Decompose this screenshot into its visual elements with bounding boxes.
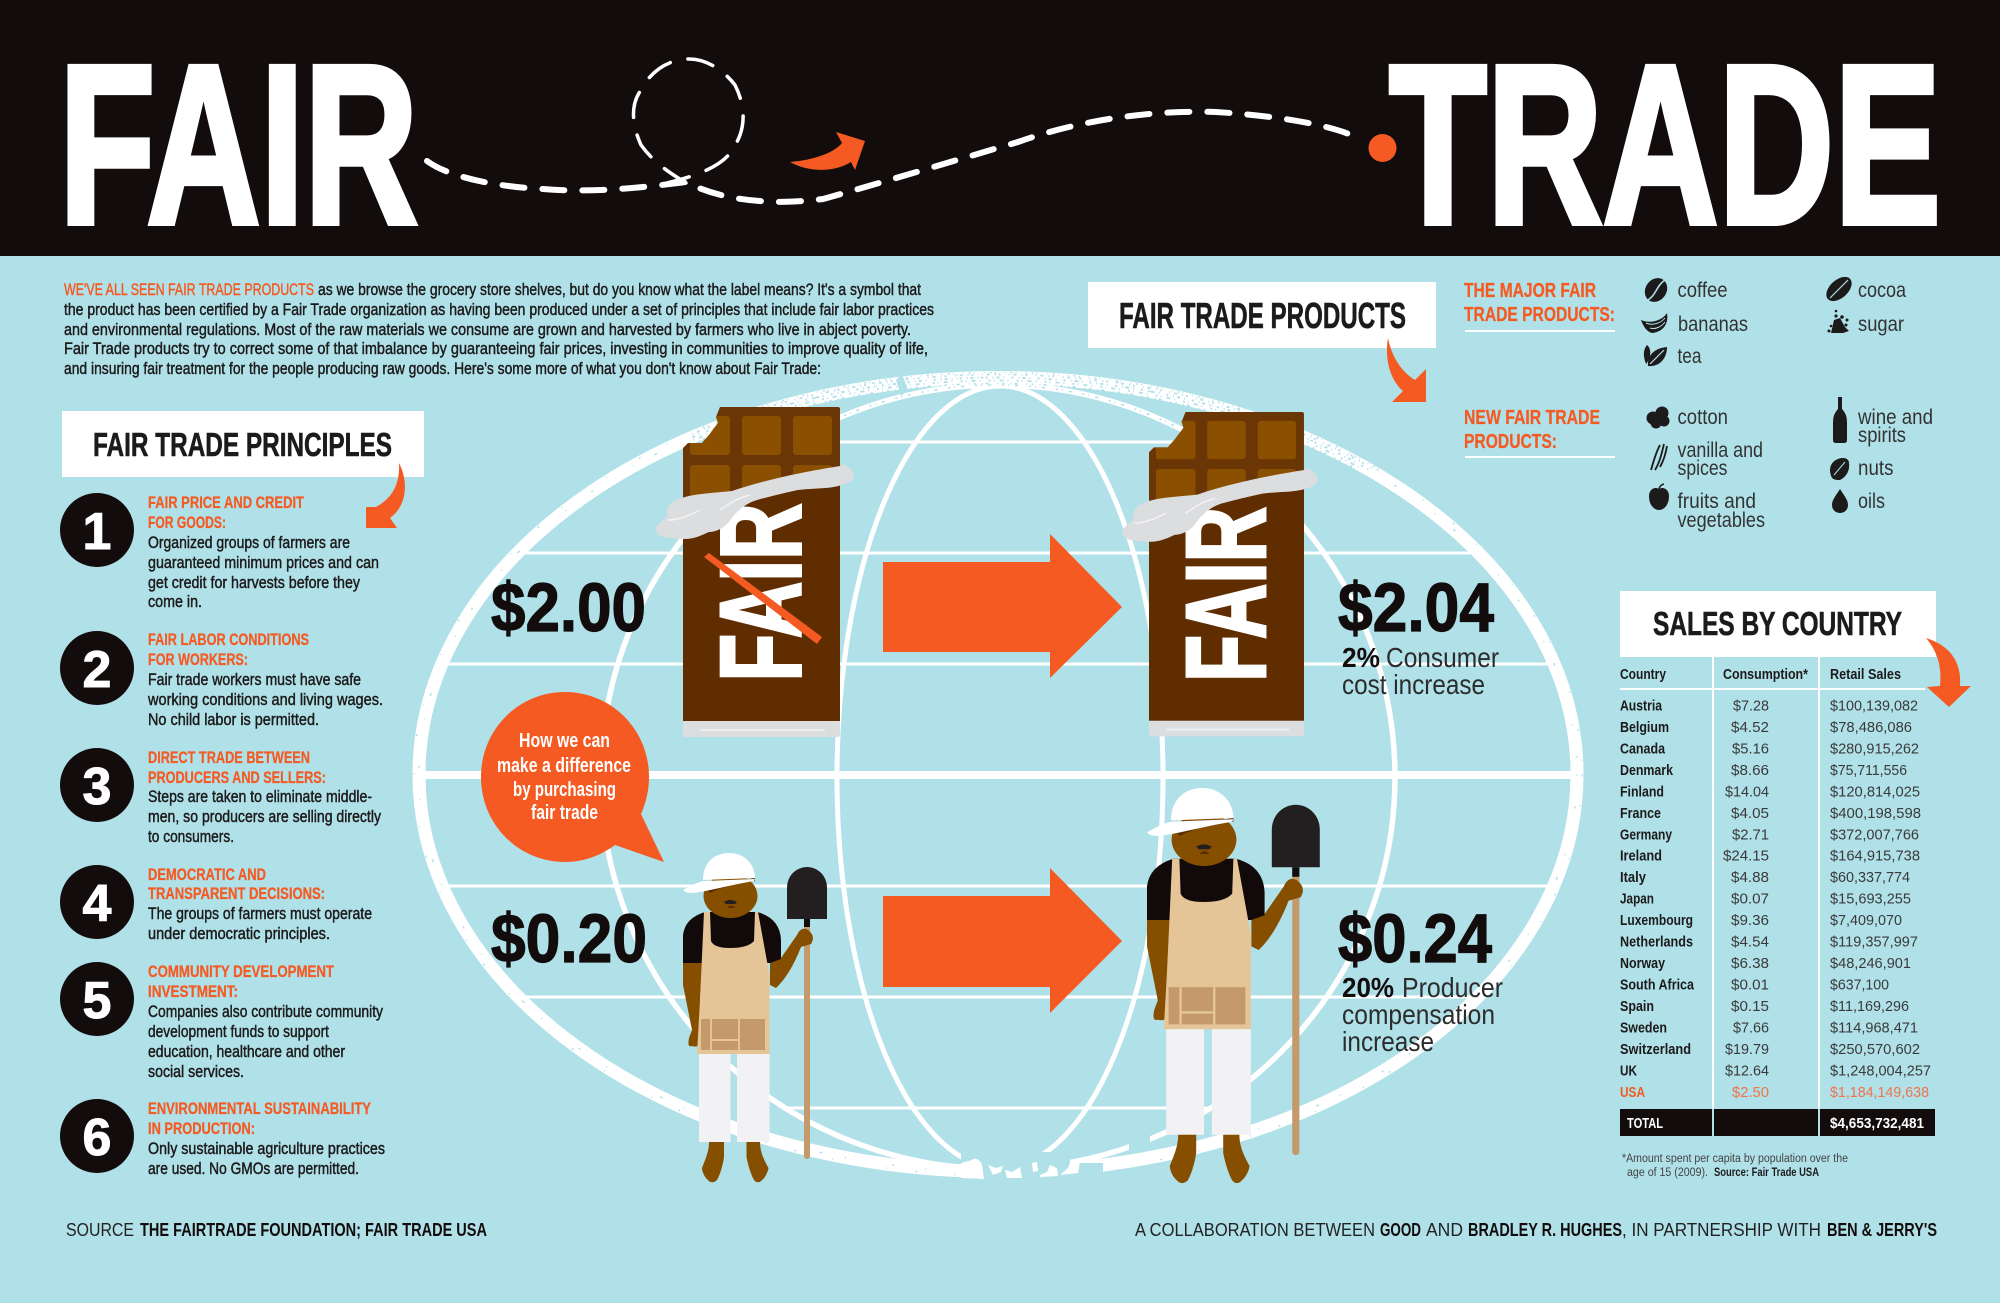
table rows: Switzerland (1620, 1042, 1691, 1058)
table rows: Sweden (1620, 1020, 1667, 1036)
principle 1: FAIR PRICE AND CREDIT (148, 494, 304, 512)
table header row (1620, 667, 1901, 683)
table rows: $250,570,602 (1830, 1042, 1920, 1058)
orange destination dot (1368, 134, 1396, 162)
footer: source: SOURCE (66, 1220, 134, 1240)
table rows: $6.38 (1731, 956, 1769, 972)
strike through fair (704, 553, 822, 644)
table rows: $15,693,255 (1830, 892, 1911, 908)
producer compensation note: compensation (1342, 999, 1495, 1030)
table rows: USA (1620, 1085, 1645, 1101)
speech bubble: make a difference (497, 755, 631, 777)
chocolate bar: fair trade: FAIR (1163, 507, 1290, 682)
arrow: principles (366, 463, 405, 528)
table footnote: Source: Fair Trade USA (1714, 1167, 1819, 1179)
table header row: Retail Sales (1830, 667, 1901, 683)
price after: $0.24: $0.24 (1338, 900, 1492, 977)
table rows: Spain (1620, 999, 1654, 1015)
new products label: PRODUCTS: (1464, 431, 1557, 453)
table rows: $120,814,025 (1830, 784, 1920, 800)
table footnote: age of 15 (2009). (1627, 1167, 1708, 1179)
table rows: $5.16 (1732, 741, 1769, 757)
intro paragraph: and environmental regulations. Most of the raw materials we consume are grown and harvested by farmers who live in abject poverty. (64, 320, 911, 339)
table rows: $8.66 (1731, 763, 1769, 779)
product: fruits and vegetables (1649, 484, 1765, 532)
principle 6: Only sustainable agriculture practices (148, 1140, 385, 1158)
table rows: $4.88 (1731, 870, 1769, 886)
new products label (1464, 407, 1615, 458)
footer: collaboration credit: GOOD (1380, 1220, 1421, 1240)
principle 5: COMMUNITY DEVELOPMENT (148, 963, 334, 981)
table rows: $114,968,471 (1830, 1020, 1918, 1036)
table rows: $0.01 (1731, 978, 1769, 994)
principle 2: working conditions and living wages. (147, 691, 383, 709)
table rows: Canada (1620, 741, 1666, 757)
principle 4: 4 (83, 875, 112, 933)
speech bubble: How we can (519, 730, 610, 752)
principle 4: The groups of farmers must operate (148, 905, 372, 923)
principle 3 (60, 748, 382, 846)
principle 6 (60, 1099, 385, 1178)
table rows: $24.15 (1723, 849, 1769, 865)
sales by country heading (1620, 591, 1971, 707)
principle 1: guaranteed minimum prices and can (148, 554, 379, 572)
principle 6: ENVIRONMENTAL SUSTAINABILITY (148, 1100, 371, 1118)
principles heading box (62, 411, 424, 528)
price after: $2.04: $2.04 (1338, 569, 1494, 646)
product: vanilla and spices (1651, 439, 1763, 480)
principle 5: education, healthcare and other (148, 1043, 345, 1061)
table rows: Austria (1620, 698, 1663, 714)
table rows: $119,357,997 (1830, 935, 1918, 951)
table total row: $4,653,732,481 (1830, 1116, 1924, 1132)
product: tea (1644, 345, 1702, 368)
new products label: NEW FAIR TRADE (1464, 407, 1600, 429)
footer: collaboration credit: BRADLEY R. HUGHES (1468, 1220, 1622, 1240)
consumer cost note: cost increase (1342, 669, 1485, 700)
product: oils (1832, 489, 1885, 513)
table rows: $75,711,556 (1830, 763, 1907, 779)
principle 1: come in. (148, 593, 202, 611)
sales table (1620, 657, 1935, 1136)
product: wine and spirits (1833, 397, 1933, 447)
table rows: $637,100 (1830, 978, 1889, 994)
principle 2: Fair trade workers must have safe (148, 671, 361, 689)
footer: source: THE FAIRTRADE FOUNDATION; FAIR TRADE USA (140, 1220, 487, 1240)
table rows: Germany (1620, 827, 1672, 843)
table rows: $4.54 (1731, 935, 1769, 951)
principle 5: social services. (148, 1063, 244, 1081)
table total row: TOTAL (1627, 1116, 1663, 1132)
table rows: $1,248,004,257 (1830, 1063, 1931, 1079)
principle 2: 2 (83, 641, 111, 699)
footer: collaboration credit: , IN PARTNERSHIP WITH (1622, 1220, 1821, 1240)
product: bananas (1641, 313, 1748, 336)
table header row: Consumption* (1723, 667, 1808, 683)
table rows: UK (1620, 1063, 1637, 1079)
product: fruits and vegetables: fruits and (1678, 490, 1756, 513)
footer: collaboration credit (1135, 1220, 1937, 1240)
product: fruits and vegetables: vegetables (1678, 509, 1765, 532)
table rows: $0.07 (1731, 892, 1769, 908)
table rows: $14.04 (1725, 784, 1769, 800)
price before: $0.20: $0.20 (491, 900, 647, 977)
major products label (1464, 280, 1615, 332)
principle 5: 5 (83, 972, 111, 1030)
major products label: TRADE PRODUCTS: (1464, 304, 1615, 326)
principle 3: to consumers. (148, 828, 234, 846)
small farmer with shovel (683, 853, 827, 1182)
table rows: $280,915,262 (1830, 741, 1919, 757)
principle 6: 6 (83, 1109, 111, 1167)
table rows: France (1620, 806, 1661, 822)
product: wine and spirits: wine and (1857, 406, 1933, 429)
principle 1: get credit for harvests before they (148, 574, 361, 592)
intro paragraph: as we browse the grocery store shelves, but do you know what the label means? It's a symbol that (318, 280, 921, 299)
fair trade products heading box (1088, 282, 1436, 402)
principle 1: 1 (83, 503, 111, 561)
table total row (1620, 1109, 1935, 1136)
table rows: Luxembourg (1620, 913, 1693, 929)
table rows: $19.79 (1725, 1042, 1769, 1058)
arrow: sales (1926, 638, 1971, 707)
principle 2: FAIR LABOR CONDITIONS (148, 631, 309, 649)
table footnote (1622, 1153, 1848, 1179)
product: nuts: nuts (1858, 457, 1894, 480)
producer compensation note (1342, 972, 1503, 1057)
consumer cost note: 2% (1342, 642, 1380, 673)
speech bubble: fair trade (531, 802, 598, 824)
intro paragraph: WE'VE ALL SEEN FAIR TRADE PRODUCTS (64, 280, 314, 299)
table rows: $2.50 (1732, 1085, 1769, 1101)
product: nuts (1830, 457, 1894, 480)
principle 2: No child labor is permitted. (148, 711, 319, 729)
table rows: $372,007,766 (1830, 827, 1919, 843)
chocolate bar: fair trade (1122, 412, 1318, 736)
header band (0, 0, 2000, 272)
product: cocoa: cocoa (1858, 279, 1906, 302)
product: coffee: coffee (1678, 279, 1728, 302)
table rows: Netherlands (1620, 935, 1693, 951)
sales by country heading: SALES BY COUNTRY (1653, 605, 1902, 642)
dashed loop path (427, 59, 1356, 202)
principle 3: men, so producers are selling directly (148, 808, 382, 826)
table rows: $164,915,738 (1830, 849, 1920, 865)
small orange arrow (790, 132, 865, 170)
product: sugar: sugar (1858, 313, 1904, 336)
fair trade products heading box: FAIR TRADE PRODUCTS (1119, 295, 1406, 336)
price before: $2.00: $2.00 (491, 569, 646, 646)
product: coffee (1640, 274, 1728, 306)
product: vanilla and spices: spices (1678, 457, 1728, 480)
product: cocoa (1822, 272, 1906, 306)
large farmer with shovel (1147, 788, 1320, 1183)
principle 3: DIRECT TRADE BETWEEN (148, 749, 310, 767)
principle 1: FOR GOODS: (148, 514, 226, 532)
intro paragraph: Fair Trade products try to correct some of that imbalance by guaranteeing fair prices, investing in communities to improve quality of life, (64, 339, 928, 358)
speech bubble (481, 692, 664, 862)
table rows: South Africa (1620, 978, 1695, 994)
table rows: $1,184,149,638 (1830, 1085, 1929, 1101)
producer compensation note: increase (1342, 1026, 1434, 1057)
intro paragraph: the product has been certified by a Fair Trade organization as having been produced under a set of principles that include fair labor practices (64, 300, 934, 319)
principle 3: 3 (83, 758, 111, 816)
consumer cost note: Consumer (1386, 642, 1499, 673)
arrow: farmer pay (883, 868, 1122, 1013)
table rows: $2.71 (1732, 827, 1769, 843)
principle 4 (60, 865, 372, 943)
footer: collaboration credit: AND (1426, 1220, 1463, 1240)
table rows: $4.52 (1731, 720, 1769, 736)
table rows: Ireland (1620, 849, 1662, 865)
table rows: Italy (1620, 870, 1646, 886)
table rows: $400,198,598 (1830, 806, 1921, 822)
product: oils: oils (1858, 490, 1885, 513)
principle 4: TRANSPARENT DECISIONS: (148, 885, 325, 903)
major products label: THE MAJOR FAIR (1464, 280, 1596, 302)
table rows: $60,337,774 (1830, 870, 1910, 886)
principle 5: development funds to support (148, 1023, 329, 1041)
broken lower edge (961, 1128, 1177, 1185)
principle 4: under democratic principles. (148, 925, 330, 943)
table rows: $4.05 (1731, 806, 1769, 822)
table rows: $48,246,901 (1830, 956, 1911, 972)
table rows: $9.36 (1731, 913, 1769, 929)
principle 3: Steps are taken to eliminate middle- (148, 788, 372, 806)
footer: collaboration credit: BEN & JERRY'S (1827, 1220, 1937, 1240)
principle 4: DEMOCRATIC AND (148, 866, 266, 884)
table rows: Denmark (1620, 763, 1674, 779)
table header row: Country (1620, 667, 1666, 683)
principle 6: IN PRODUCTION: (148, 1120, 255, 1138)
table rows: Norway (1620, 956, 1665, 972)
principle 2: FOR WORKERS: (148, 651, 248, 669)
intro paragraph: and insuring fair treatment for the people producing raw goods. Here's some more of what you don't know about Fair Trade: (64, 359, 821, 378)
producer compensation note: Producer (1402, 972, 1503, 1003)
product: tea: tea (1678, 345, 1702, 368)
table rows: $100,139,082 (1830, 698, 1918, 714)
principle 3: PRODUCERS AND SELLERS: (148, 769, 326, 787)
arrow: chocolate price (883, 534, 1122, 678)
product: sugar (1828, 310, 1904, 336)
principle 5: INVESTMENT: (148, 983, 238, 1001)
principle 5 (60, 962, 384, 1081)
product: cotton: cotton (1678, 406, 1728, 429)
table rows: $78,486,086 (1830, 720, 1912, 736)
table rows: $7.28 (1733, 698, 1769, 714)
product: vanilla and spices: vanilla and (1678, 439, 1763, 462)
product: cotton (1646, 406, 1728, 429)
producer compensation note: 20% (1342, 972, 1394, 1003)
table rows: $7.66 (1733, 1020, 1769, 1036)
principle 1 (60, 493, 379, 611)
product: bananas: bananas (1678, 313, 1748, 336)
consumer cost note (1342, 642, 1499, 700)
table footnote: *Amount spent per capita by population over the (1622, 1153, 1848, 1165)
distressed overlay (690, 372, 1378, 470)
title: fair: FAIR (59, 19, 418, 272)
table rows: $12.64 (1725, 1063, 1769, 1079)
table rows: $0.15 (1731, 999, 1769, 1015)
principle 6: are used. No GMOs are permitted. (148, 1160, 359, 1178)
table rows (1620, 698, 1931, 1101)
intro paragraph (64, 280, 934, 378)
globe illustration (400, 372, 1600, 1185)
table rows: $7,409,070 (1830, 913, 1902, 929)
arrow: products (1387, 338, 1426, 402)
speech bubble: by purchasing (513, 779, 616, 801)
principles heading box: FAIR TRADE PRINCIPLES (93, 426, 392, 463)
footer: collaboration credit: A COLLABORATION BETWEEN (1135, 1220, 1375, 1240)
principle 5: Companies also contribute community (148, 1003, 384, 1021)
principle 1: Organized groups of farmers are (148, 534, 350, 552)
footer: source (66, 1220, 487, 1240)
table rows: $11,169,296 (1830, 999, 1909, 1015)
chocolate bar: before fair trade (656, 407, 854, 737)
principle 2 (60, 631, 383, 729)
product: wine and spirits: spirits (1858, 424, 1906, 447)
table rows: Belgium (1620, 720, 1669, 736)
chocolate bar: before fair trade: FAIR (698, 504, 826, 682)
table rows: Finland (1620, 784, 1664, 800)
table rows: Japan (1620, 892, 1654, 908)
